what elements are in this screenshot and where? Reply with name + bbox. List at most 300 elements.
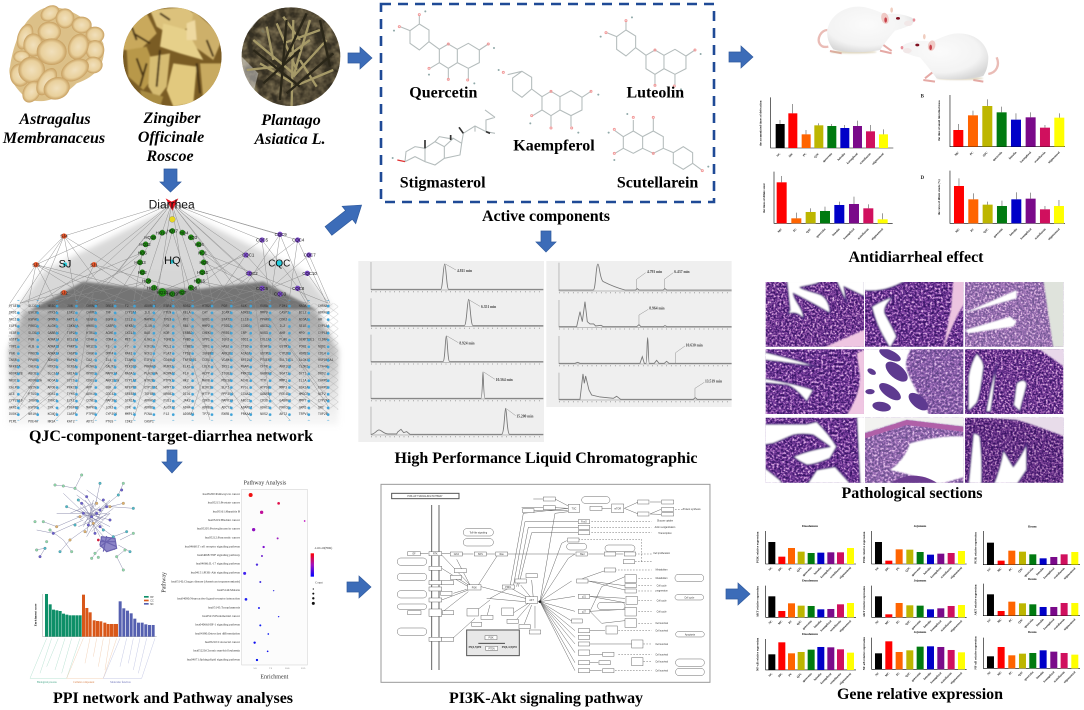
- bar chart: PI3K Ileum: scutellarein: [1052, 566, 1066, 580]
- dot plot: pathway analysis: 12.5: [301, 667, 306, 670]
- outcome labels: Transcription: [658, 532, 672, 535]
- bar chart: NF-kB Ileum: luteolin: [1035, 670, 1045, 680]
- bar chart: NF-kB Ileum: PC: [1008, 670, 1013, 676]
- dot plot: pathway analysis: Enrichment: [260, 674, 289, 680]
- bar chart: NF-kB Jejunum: kaempferol: [929, 671, 942, 684]
- bar chart: NF-kB Duodenum: quercetin: [801, 672, 813, 683]
- bar chart: NF-kB Duodenum: luteolin: [813, 672, 823, 681]
- signal boxes: Ras: [500, 554, 505, 556]
- signal boxes: mTOR: [614, 508, 621, 510]
- bar chart: D rate of dilute stools: MC: [954, 227, 961, 234]
- outcome labels: Glucose uptake: [657, 520, 674, 523]
- tissue section 2: [865, 282, 964, 347]
- chromatograms: right column: [546, 261, 732, 407]
- bar chart: A accumulated times of defecation: stigmasterol: [871, 152, 885, 166]
- bar chart: GO enrichment: CC: [150, 601, 154, 603]
- target gene labels: PIM1 PDE4A NR3A KAT2 ADT1 PTGS CDK2 CASP1: [9, 420, 154, 424]
- bar chart: NF-kB Ileum: NC: [986, 670, 992, 676]
- signal boxes: GF: [412, 554, 416, 556]
- bar chart: AKT Jejunum: AKT relative expression: [862, 586, 866, 617]
- bar chart: NF-kB Jejunum: QJC: [904, 671, 911, 678]
- nodes: SJ herb: [32, 233, 98, 295]
- nodes: HQ ring: HQ10: [157, 290, 169, 295]
- bar chart: PI3K Jejunum: QJC: [904, 566, 911, 573]
- nodes: CQC herb: [242, 232, 317, 297]
- outcome labels: Metabolism: [656, 577, 668, 580]
- molecule: kaempferol: [498, 69, 599, 134]
- dot plot: pathway analysis: hsa05219:Bladder cancer: [208, 518, 241, 522]
- target gene labels: GSTP1 PGR ADRA1A BCL2L1 CD40 CDK4 MET GJA1 TGFB1 THBD SPP1 IGF2 ODC1 COL1A1 PLAU SERPINE1 CLDN4: [9, 338, 328, 342]
- nodes: HQ ring: HQ4: [180, 230, 189, 235]
- target gene labels: PTGER4 SLC6A4 NR3C2 JUN CHRNA7 DRD2 F2 ADORA3 ESR1 NOS2 HTR2A PGR SLK RXRA PIM1 MAOA CHRNA4: [9, 304, 330, 308]
- tissue section 6: [965, 349, 1064, 414]
- chromatograms: right column: 8.964 min: [649, 306, 665, 310]
- bar chart: NF-kB Jejunum: stigmasterol: [949, 671, 963, 685]
- bar chart: AKT Ileum: NC: [986, 618, 992, 623]
- bar chart: AKT Ileum: Ileum: [1028, 577, 1037, 581]
- bar chart: NF-kB Ileum: MC: [996, 670, 1003, 677]
- outcome labels: Cell survival: [655, 622, 668, 625]
- signal boxes: Bad: [580, 554, 585, 556]
- bar chart: PI3K Jejunum: luteolin: [922, 566, 932, 576]
- bar chart: PI3K Duodenum: luteolin: [813, 566, 823, 576]
- bar chart: AKT Ileum: scutellarein: [1052, 617, 1066, 631]
- bar chart: PI3K Ileum: [974, 525, 1080, 580]
- chromatograms: left column: 8.924 min: [459, 341, 475, 345]
- target gene labels: NFKBIA CHEK2 HTR2C SCN5A KCNH2 CALM1 PIK3CG PRKACA RUNX2 ELK1 LDLR IRS1 MGAM CFTR AKR1C3 CLDN1 LTA4H: [9, 365, 328, 369]
- bar chart: A accumulated times of defecation: MC: [788, 152, 794, 158]
- target gene labels: DUOX2 NR1H4 KCNQ1 CASP1 PTPRC CYP2C9 MMP13 PCNA F12 ADORA1 TP73 RXRB PRKAA1 NOS2 AKT2 TRPV1 TOP2B: [9, 412, 328, 416]
- outcome labels: Cell survival: [655, 670, 668, 673]
- bar chart: AKT Ileum: AKT relative expression: [974, 584, 978, 615]
- heading: gene relative expression: Gene relative expression: [837, 686, 1003, 703]
- bar chart: PI3K Jejunum: MC: [884, 566, 890, 572]
- bar chart: B: quercetin: [992, 150, 1003, 162]
- chromatograms: left column: 6.351 min: [481, 305, 496, 309]
- bar chart: PI3K Duodenum: stigmasterol: [838, 566, 852, 580]
- bar chart: A accumulated times of defecation: QJC: [813, 152, 820, 159]
- bar chart: PI3K Jejunum: stigmasterol: [949, 566, 963, 580]
- bar chart: B: QJC: [982, 151, 989, 158]
- tissue section 4: [766, 349, 864, 414]
- bar chart: C times of dilute stool: kaempferol: [842, 227, 855, 240]
- bar chart: PI3K Duodenum: NC: [767, 566, 773, 572]
- target gene labels: ADORA2B ABCB1 SLC2A4 GRIA2 OPRD1 MAPK14 RASA1 PLA2G4A KCNMA1 F10 ACPP ITGB2 PRKCD GABRA2 SOAT1 SYT1 DRD2: [9, 371, 326, 375]
- target gene labels: PGR PRKCB ADRA2A CASP8 CHUK DPP4 RAF1 NCF1 PLAT TP63 IGFBP3 AKR1B1 ACACA GSTM2 CYP2B6 HSPB1 CD14: [9, 351, 326, 355]
- dot plot: pathway analysis: Pathway Analysis: [244, 480, 287, 486]
- bar chart: AKT Duodenum: AKT relative expression: [756, 586, 760, 617]
- hub: diarrhea node: [149, 197, 195, 222]
- nodes: SJ herb: SJ: [59, 259, 71, 271]
- bar chart: PI3K Jejunum: PC: [895, 566, 901, 572]
- target gene labels: CALM2 GRIN1 APOB PRKCE APP GSR NPEPPS CYP19A1 HPRT1 CASP7 BIRC5 SLPI PYGL ATP5B MMP3 GSK3A CHRM3: [9, 385, 328, 389]
- bar chart: AKT Duodenum: NC: [767, 619, 773, 625]
- bar chart: NF-kB Ileum: QJC: [1017, 670, 1024, 677]
- arrow: network to active components: [322, 196, 368, 240]
- bar chart: PI3K Jejunum: NC: [874, 566, 880, 572]
- target gene labels: ACE PTGS1 NOS1 TYMS ADH1C CDC42 SREBF1 TGFBR1 NR0B2 DIO1 MTTP PPP3CA CCNA2 GABRB3 PDE4D HMGCR NCF2: [9, 392, 326, 396]
- bar chart: PI3K Ileum: MC: [996, 567, 1003, 573]
- nodes: HQ ring: HQ: [164, 255, 181, 267]
- bar chart: D rate of dilute stools: QJC: [982, 227, 989, 234]
- bar chart: B: MC: [954, 151, 960, 157]
- illustration: two white rats: [819, 7, 998, 82]
- bar chart: GO enrichment: Biological process: [37, 681, 57, 684]
- molecule: quercetin: [393, 10, 495, 84]
- arrow: active components to HPLC: [536, 231, 556, 252]
- bar chart: NF-kB Jejunum: luteolin: [922, 671, 932, 681]
- outcome labels: Cell proliferation: [653, 552, 671, 555]
- bar chart: AKT Jejunum: QJC: [904, 619, 911, 626]
- tissue section 7: [766, 418, 864, 483]
- bar chart: AKT Ileum: [974, 577, 1080, 631]
- nodes: HQ ring: HQ2: [138, 270, 147, 275]
- bar chart: B: [921, 94, 1065, 164]
- heading: HPLC: High Performance Liquid Chromatographic: [394, 450, 698, 467]
- bar chart: A accumulated times of defecation: [758, 97, 893, 166]
- network: QJC component target diarrhea: [8, 197, 339, 425]
- panel: PPI and pathway analyses: [30, 474, 332, 684]
- bar chart: NF-kB Duodenum: kaempferol: [819, 672, 832, 685]
- dot plot: pathway analysis: hsa05145:Toxoplasmosis: [208, 605, 241, 609]
- bar chart: GO enrichment: Molecular function: [110, 681, 131, 684]
- bar chart: AKT Duodenum: kaempferol: [819, 619, 832, 632]
- signal boxes: p27: [582, 611, 587, 613]
- dot plot: pathway analysis: hsa04151:PI3K-Akt signaling pathway: [191, 571, 240, 575]
- bar chart: PI3K Jejunum: Jejunum: [914, 524, 926, 528]
- bar chart: PI3K Ileum: quercetin: [1023, 566, 1035, 578]
- chromatograms: left column: 15.200 min: [516, 414, 533, 418]
- herb name labels: Zingiber: [143, 110, 201, 127]
- bar chart: PI3K Duodenum: MC: [777, 566, 783, 572]
- dot plot: pathway analysis: Pathway: [162, 572, 168, 593]
- charts: antidiarrheal bar charts: [758, 94, 1065, 241]
- herb name labels: Membranaceus: [2, 130, 105, 147]
- heading: network: QJC-component-target-diarrhea network: [29, 428, 313, 445]
- bar chart: PI3K Jejunum: scutellarein: [939, 566, 953, 579]
- hub: diarrhea node: Diarrhea: [149, 197, 195, 211]
- signal boxes: TSC: [572, 508, 577, 510]
- bar chart: AKT Duodenum: QJC: [796, 619, 803, 626]
- nodes: HQ ring: HQ17: [167, 229, 179, 234]
- dot plot: pathway analysis: [162, 480, 332, 680]
- bar chart: NF-kB Duodenum: [756, 632, 856, 686]
- tissue section 5: [865, 349, 964, 414]
- dot plot: pathway analysis: hsa04668:TNF signaling pathway: [197, 553, 240, 557]
- arrow: PPI to PI3K: [347, 576, 371, 598]
- bar chart: NF-kB Duodenum: scutellarein: [829, 672, 842, 685]
- bar chart: AKT Jejunum: Jejunum: [914, 579, 926, 583]
- outcome labels: Cell cycle: [657, 611, 667, 613]
- nodes: HQ ring: HQ3: [188, 235, 198, 240]
- bar chart: AKT Jejunum: [862, 579, 967, 633]
- bar chart: B: PC: [969, 151, 974, 156]
- heading: antidiarrheal effect: Antidiarrheal effect: [848, 249, 984, 266]
- PI3K inset box: PI(4,5)P2: [469, 645, 482, 649]
- nodes: HQ ring: HQ8: [188, 285, 198, 290]
- bar chart: NF-kB Jejunum: NF-κB relative expression: [862, 637, 866, 670]
- bar chart: GO enrichment: BP: [150, 597, 154, 599]
- molecules and names: [392, 10, 709, 191]
- chromatograms: right column: 6.437 min: [674, 270, 690, 274]
- chromatograms: right column: 13.519 min: [705, 379, 722, 383]
- arrow: network to PPI: [162, 450, 182, 473]
- bar chart: AKT Jejunum: kaempferol: [929, 619, 942, 632]
- bar chart: AKT Duodenum: stigmasterol: [838, 619, 852, 633]
- bar chart: AKT Jejunum: luteolin: [922, 619, 932, 629]
- bar chart: A accumulated times of defecation: quercetin: [822, 152, 833, 163]
- dot plot: pathway analysis: hsa04066:IL-17 signaling pathway: [196, 562, 240, 566]
- bar chart: NF-kB Duodenum: NF-κB relative expression: [756, 637, 760, 671]
- signal boxes: [408, 497, 674, 673]
- photo: Astragalus membranaceus slices: [9, 2, 104, 106]
- bar chart: C times of dilute stool: stigmasterol: [870, 227, 884, 241]
- signal boxes: FoxO: [581, 522, 587, 524]
- rounded pathway labels: Toll-like signaling: [470, 532, 488, 534]
- nodes: HQ ring: [134, 228, 209, 297]
- bar chart: GO enrichment: Cellular component: [73, 681, 95, 684]
- target gene labels: DRD1 GSK3B HTR3A ESR2 CHRM2 TNF CYP3A4 IL6 PTEN RELA CAT ICAM1 ADRB2 MMP9 CASP3 BCL2 ADRA2B: [9, 311, 330, 315]
- bar chart: GO enrichment: MF: [150, 604, 154, 606]
- bar chart: NF-kB Jejunum: NC: [874, 671, 880, 677]
- bar chart: D rate of dilute stools: the rates of dilute stools (%): [937, 179, 941, 215]
- dot plot: pathway analysis: hsa04660:T cell receptor signaling pathway: [185, 544, 240, 548]
- bar chart: A accumulated times of defecation: PC: [802, 152, 807, 158]
- bar chart: AKT Ileum: luteolin: [1035, 617, 1045, 627]
- bar chart: C times of dilute stool: QJC: [805, 227, 812, 234]
- bar chart: AKT Duodenum: scutellarein: [829, 619, 842, 632]
- dot plot: pathway analysis: 5.0: [254, 667, 257, 670]
- nodes: CQC herb: CQC9: [275, 232, 287, 237]
- nodes: HQ ring: HQ13: [134, 260, 146, 265]
- bar chart: PI3K Duodenum: scutellarein: [829, 566, 842, 579]
- photo: Plantago asiatica dried herb: [242, 7, 340, 107]
- bar chart: D rate of dilute stools: D: [921, 176, 925, 181]
- bar chart: PI3K Duodenum: kaempferol: [819, 566, 832, 579]
- target gene labels: EGFR PRKCA ALOX5 CDKN1A HMOX1 CASP9 NFKB1 IL10 FOS RB1 MMP2 PTGS2 CCND1 ABCG2 IL2 SELE CYP1A1: [9, 324, 330, 328]
- herb name labels: Astragalus: [18, 111, 91, 128]
- signal boxes: AKT: [529, 599, 534, 602]
- nodes: CQC herb: CQC10: [302, 271, 317, 276]
- bar chart: NF-kB Duodenum: Duodenum: [802, 632, 818, 636]
- bar chart: D rate of dilute stools: stigmasterol: [1047, 227, 1061, 241]
- nodes: HQ ring: HQ5: [142, 279, 152, 284]
- outcome labels: Cell cycle: [657, 586, 667, 588]
- tissue section 8: [865, 418, 964, 483]
- nodes: CQC herb: CQC1: [242, 253, 255, 258]
- bar chart: PI3K Jejunum: PI3K relative expression: [862, 531, 866, 563]
- nodes: HQ ring: HQ19: [167, 292, 179, 297]
- dot plot: pathway analysis: hsa05142:Chagas disease (American trypanosomiasis): [171, 579, 240, 583]
- bar chart: NF-kB Duodenum: MC: [777, 672, 783, 678]
- bar chart: PI3K Jejunum: kaempferol: [929, 566, 942, 579]
- bar chart: PI3K Jejunum: [862, 524, 967, 580]
- arrow: herbs to diarrhea network: [160, 169, 181, 192]
- nodes: HQ ring: HQ11: [197, 270, 209, 275]
- bar chart: PI3K Duodenum: PI3K relative expression: [756, 531, 760, 563]
- heading: PI3K-Akt: PI3K-Akt signaling pathway: [449, 690, 643, 707]
- chromatograms: left column: [358, 261, 544, 442]
- nodes: HQ ring: HQ6: [138, 250, 147, 255]
- bar chart: PI3K Duodenum: Duodenum: [802, 524, 818, 528]
- nodes: HQ ring: HQ12: [139, 242, 151, 247]
- heading: PPI and pathway: PPI network and Pathway analyses: [53, 690, 293, 707]
- dot plot: pathway analysis: hsa05200:Pathways in cancer: [203, 492, 241, 496]
- bar chart: NF-kB Ileum: NF-κB relative expression: [974, 636, 978, 670]
- bar chart: A accumulated times of defecation: scutellarein: [858, 152, 872, 165]
- herb name labels: Roscoe: [145, 148, 194, 165]
- bar chart: D rate of dilute stools: luteolin: [1008, 227, 1018, 237]
- chromatograms: right column: 4.793 min: [647, 270, 662, 274]
- bar chart: AKT Ileum: PC: [1008, 618, 1013, 623]
- outcome labels: Cell survival: [655, 630, 668, 633]
- signal boxes: RTK: [433, 554, 438, 556]
- arrow: PI3K to gene expression: [726, 583, 750, 605]
- nodes: CQC herb: CQC: [268, 259, 290, 270]
- bar chart: PI3K Jejunum: quercetin: [910, 566, 922, 577]
- bar chart: NF-kB Ileum: [974, 630, 1080, 684]
- nodes: HQ ring: HQ14: [156, 230, 168, 235]
- target gene labels: [9, 304, 334, 424]
- dot plot: pathway analysis: hsa05161:Hepatitis B: [213, 509, 240, 513]
- nodes: HQ ring: HQ1: [198, 250, 208, 255]
- dot plot: pathway analysis: hsa05215:Prostate cancer: [208, 501, 241, 505]
- outcome labels: progression: [656, 590, 668, 593]
- molecule: luteolin: [600, 16, 702, 90]
- arrow: active components to mice: [729, 46, 753, 68]
- bar chart: A accumulated times of defecation: the accumulated times of defecation: [758, 100, 762, 146]
- bar chart: A accumulated times of defecation: kaempferol: [846, 152, 859, 165]
- bar chart: PI3K Duodenum: PC: [787, 566, 793, 572]
- bar chart: AKT Duodenum: PC: [787, 619, 793, 625]
- dot plot: pathway analysis: hsa05220:Chronic myeloid leukemia: [193, 649, 241, 653]
- bar chart: PI3K Ileum: stigmasterol: [1063, 566, 1076, 580]
- bar chart: NF-kB Jejunum: [862, 630, 967, 685]
- bar chart: NF-kB Ileum: kaempferol: [1042, 670, 1055, 683]
- nodes: HQ ring: HQ15: [194, 279, 206, 284]
- bar chart: AKT Ileum: QJC: [1017, 618, 1024, 625]
- photo: Zingiber officinale dried slices: [123, 7, 223, 107]
- molecule: scutellarein: [608, 113, 709, 172]
- chromatograms: left column: 4.811 min: [457, 269, 472, 273]
- bar chart: NF-kB Jejunum: PC: [895, 671, 901, 677]
- dot plot: pathway analysis: hsa05212:Pancreatic cancer: [205, 536, 241, 540]
- bar chart: AKT Duodenum: quercetin: [801, 619, 813, 631]
- bar chart: PI3K Ileum: kaempferol: [1042, 566, 1055, 580]
- molecule: stigmasterol: [392, 110, 495, 165]
- bar chart: AKT Jejunum: stigmasterol: [949, 619, 963, 633]
- arrow: herbs to active components: [348, 47, 372, 69]
- heading: active components: Active components: [482, 208, 610, 225]
- bar chart: C times of dilute stool: scutellarein: [856, 227, 870, 240]
- map title: PI3K-AKT SIGNALING PATHWAY: [407, 495, 443, 498]
- bar chart: AKT Jejunum: PC: [895, 619, 901, 625]
- bar chart: AKT Duodenum: [756, 579, 856, 633]
- bar chart: PI3K Ileum: PI3K relative expression: [974, 532, 978, 564]
- nodes: SJ herb: SJ3: [32, 262, 40, 267]
- chromatograms: right column: 10.630 min: [686, 343, 703, 347]
- bar chart: NF-kB Ileum: Ileum: [1028, 630, 1037, 634]
- herb name labels: Asiatica L.: [253, 131, 326, 148]
- bar chart: A accumulated times of defecation: luteolin: [836, 152, 846, 162]
- outcome labels: Protein synthesis: [683, 508, 701, 511]
- heading: pathological sections: Pathological sections: [842, 485, 982, 502]
- target gene labels: AKR1 HSPD1 SYK PDGFRB MAPK3 LCN2 VDR ADRB1 ALOX12 ADH4 ADRB3 ADCY1 ADAM17 HDAC1 PRKCQ GRM1 SRC: [9, 405, 324, 409]
- tissue section 1: [766, 282, 864, 347]
- cell membrane: [432, 505, 439, 670]
- target gene labels: INSR PPARD ADH1B MAPK8 CA2 IL4 ICAM1 EIF6 CD40LG TNFSF15 CCR1 VCAM1 NFE2L2 PTGER3 SULT1E1 ALOX15 HSP90AA1: [9, 358, 334, 362]
- outcome labels: Cell survival: [655, 653, 668, 656]
- bar chart: C times of dilute stool: quercetin: [815, 227, 827, 239]
- rounded pathway labels: Apoptosis: [685, 633, 696, 636]
- panel: pathological sections: [763, 280, 1065, 485]
- nodes: SJ herb: SJ4: [60, 234, 68, 239]
- target gene labels: CYP2C19 IKBKB TNNC1 E2F1 CCNE1 MAP2K1 SCN1A ADRA1D PLB1 JAK2 CDK6 MAPK10 ABCC1 CD36 GABRG2 MMP7 CYP2A6: [9, 399, 330, 403]
- dot plot: pathway analysis: -LOG10(FDR): [314, 546, 332, 550]
- nodes: HQ ring: HQ16: [147, 285, 159, 290]
- signal boxes: PI3K: [472, 587, 477, 589]
- bar chart: A accumulated times of defecation: NC: [775, 152, 781, 158]
- bar chart: PI3K Ileum: PC: [1008, 567, 1013, 572]
- PI3K inset box: [467, 630, 519, 656]
- nodes: CQC herb: CQC2: [246, 271, 258, 276]
- bar chart: AKT Jejunum: scutellarein: [939, 619, 953, 632]
- bar chart: B: the time of small intestinal mass: [937, 99, 941, 141]
- nodes: CQC herb: CQC5: [256, 238, 269, 243]
- name: scutellarein: Scutellarein: [617, 174, 698, 191]
- dot plot: pathway analysis: Count: [315, 581, 323, 585]
- target gene labels: NR1I2 HSPA5 OPRM1 AKT1 VEGFA EGFR CCL2 MAPK1 TP53 MYC SOD1 STAT3 IL1B PPARG CDK2 NCOA2 AR: [9, 317, 322, 321]
- bar chart: NF-kB Ileum: stigmasterol: [1063, 670, 1076, 684]
- bar chart: D rate of dilute stools: quercetin: [992, 227, 1004, 239]
- herb name labels: Officinale: [138, 129, 204, 146]
- nodes: CQC herb: CQC7: [304, 253, 316, 258]
- tissue section 3: [965, 282, 1064, 347]
- outcome labels: Metabolism: [656, 569, 668, 572]
- bar chart: C times of dilute stool: PC: [792, 227, 798, 233]
- dot plot: pathway analysis: hsa05213:Endometrial cancer: [202, 614, 241, 618]
- chromatograms: left column: 10.564 min: [496, 378, 513, 382]
- bar chart: NF-kB Ileum: scutellarein: [1052, 670, 1066, 683]
- bar chart: AKT Ileum: stigmasterol: [1063, 617, 1076, 631]
- nodes: HQ ring: HQ9: [200, 260, 209, 265]
- nodes: HQ ring: HQ4: [195, 242, 204, 247]
- nodes: SJ herb: SJ2: [60, 290, 68, 295]
- bar chart: AKT Ileum: kaempferol: [1042, 617, 1055, 631]
- signal boxes: p21: [582, 596, 587, 598]
- bar chart: GO enrichment: [30, 594, 157, 684]
- bar chart: D rate of dilute stools: PC: [969, 227, 975, 233]
- nodes: HQ ring: HQ18: [144, 235, 156, 240]
- bar chart: D rate of dilute stools: kaempferol: [1019, 227, 1032, 240]
- bar chart: C times of dilute stool: the times of dilute stool: [762, 183, 766, 213]
- bar chart: C times of dilute stool: luteolin: [831, 227, 841, 237]
- bar chart: B: kaempferol: [1019, 150, 1032, 164]
- bar chart: D rate of dilute stools: [921, 171, 1065, 241]
- bar chart: NF-kB Duodenum: NC: [767, 672, 773, 678]
- outcome labels: Cell cycle: [657, 600, 667, 602]
- bar chart: NF-kB Duodenum: stigmasterol: [838, 672, 852, 686]
- bar chart: PI3K Ileum: NC: [986, 567, 992, 572]
- name: stigmasterol: Stigmasterol: [400, 174, 486, 191]
- bar chart: NF-kB Ileum: quercetin: [1023, 670, 1035, 682]
- outcome labels: Cell survival: [655, 661, 668, 664]
- bar chart: C times of dilute stool: MC: [777, 227, 783, 234]
- nodes: SJ herb: SJ1: [90, 262, 98, 267]
- bar chart: B: luteolin: [1008, 150, 1018, 160]
- charts: gene relative expression: [756, 524, 1080, 686]
- signal boxes: Grb2: [454, 553, 460, 556]
